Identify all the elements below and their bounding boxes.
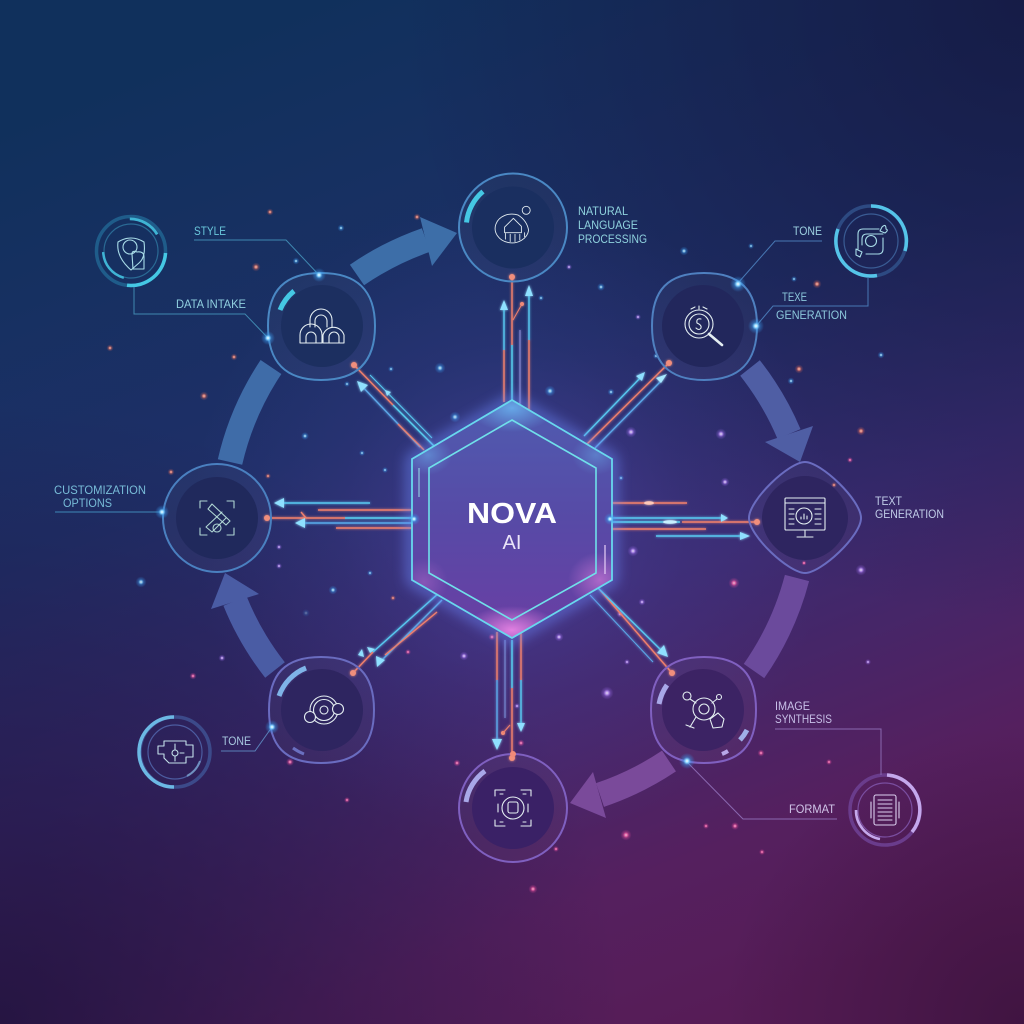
hub subtitle: AI <box>503 532 521 554</box>
node: natural language processing <box>459 174 567 282</box>
connector: left <box>264 498 412 528</box>
satellite: style badge <box>96 216 166 286</box>
label: texe generation: TEXE <box>782 290 807 304</box>
icon: three arches <box>300 309 344 343</box>
label: texe generation: GENERATION <box>776 308 847 322</box>
label: tone top right <box>730 224 822 292</box>
label: natural language processing: LANGUAGE <box>578 218 638 232</box>
connectors: hub to nodes <box>264 274 760 761</box>
label: tone top right: TONE <box>793 224 822 238</box>
label: image synthesis <box>775 699 881 775</box>
connector: upper left <box>351 362 436 450</box>
icon: circuit puzzle <box>158 741 193 763</box>
arrow: processing to text generation <box>750 368 813 462</box>
icon: language head <box>495 206 530 243</box>
node: text analysis <box>652 273 757 380</box>
node: data intake <box>268 273 375 380</box>
connector: up <box>500 274 533 412</box>
arrow: tone to customization <box>211 573 275 670</box>
label: image synthesis: IMAGE <box>775 699 810 713</box>
particle stars <box>106 208 884 894</box>
label: texe generation <box>748 277 868 334</box>
icon: scan frame <box>495 790 531 826</box>
arc: text generation to image synthesis <box>754 578 797 671</box>
label: customization options <box>54 483 169 519</box>
label: style: STYLE <box>194 224 226 238</box>
label: data intake: DATA INTAKE <box>176 297 246 311</box>
node: bottom vision <box>459 751 567 862</box>
node: customization <box>163 464 271 572</box>
satellite: format badge <box>850 775 920 845</box>
flow ring arrows <box>211 217 813 818</box>
connector: right <box>610 501 760 540</box>
label: style <box>194 224 326 282</box>
label: format: FORMAT <box>789 802 836 816</box>
central hexagon hub <box>400 384 632 654</box>
arc: customization to data intake <box>230 367 271 462</box>
label: tone lower left <box>221 720 279 751</box>
label: natural language processing <box>578 204 647 246</box>
hub title: NOVA <box>467 498 557 530</box>
connector: upper right <box>584 360 672 448</box>
satellite: tone badge top right <box>836 206 906 276</box>
icon: stopwatch magnifier <box>685 306 722 345</box>
connector: lower left <box>350 592 442 676</box>
label: natural language processing: PROCESSING <box>578 232 647 246</box>
label: text generation: GENERATION <box>875 507 944 521</box>
connector: lower right <box>590 586 675 676</box>
icon: monitor <box>785 498 825 537</box>
label: tone lower left: TONE <box>222 734 251 748</box>
label: image synthesis: SYNTHESIS <box>775 712 832 726</box>
node: image synthesis <box>651 657 756 763</box>
label: data intake <box>134 287 275 345</box>
node: text generation <box>749 462 861 573</box>
arrow: data intake to natural language processing <box>357 217 457 275</box>
icon: document <box>871 795 899 825</box>
label: customization options: OPTIONS <box>63 496 112 510</box>
icon: social frame <box>856 225 887 257</box>
icon: molecule face <box>683 692 724 728</box>
node: tone <box>269 657 374 763</box>
label: text generation: TEXT <box>875 494 903 508</box>
satellite: tone badge lower left <box>139 717 210 787</box>
arrow: image synthesis to bottom node <box>570 761 669 818</box>
connector: down <box>492 632 525 761</box>
label: natural language processing: NATURAL <box>578 204 628 218</box>
label: format <box>679 753 837 819</box>
label: text generation <box>875 494 944 521</box>
icon: tools in frame <box>200 501 234 535</box>
icon: orbit <box>304 696 344 724</box>
icon: profile badge <box>118 238 144 270</box>
label: customization options: CUSTOMIZATION <box>54 483 146 497</box>
